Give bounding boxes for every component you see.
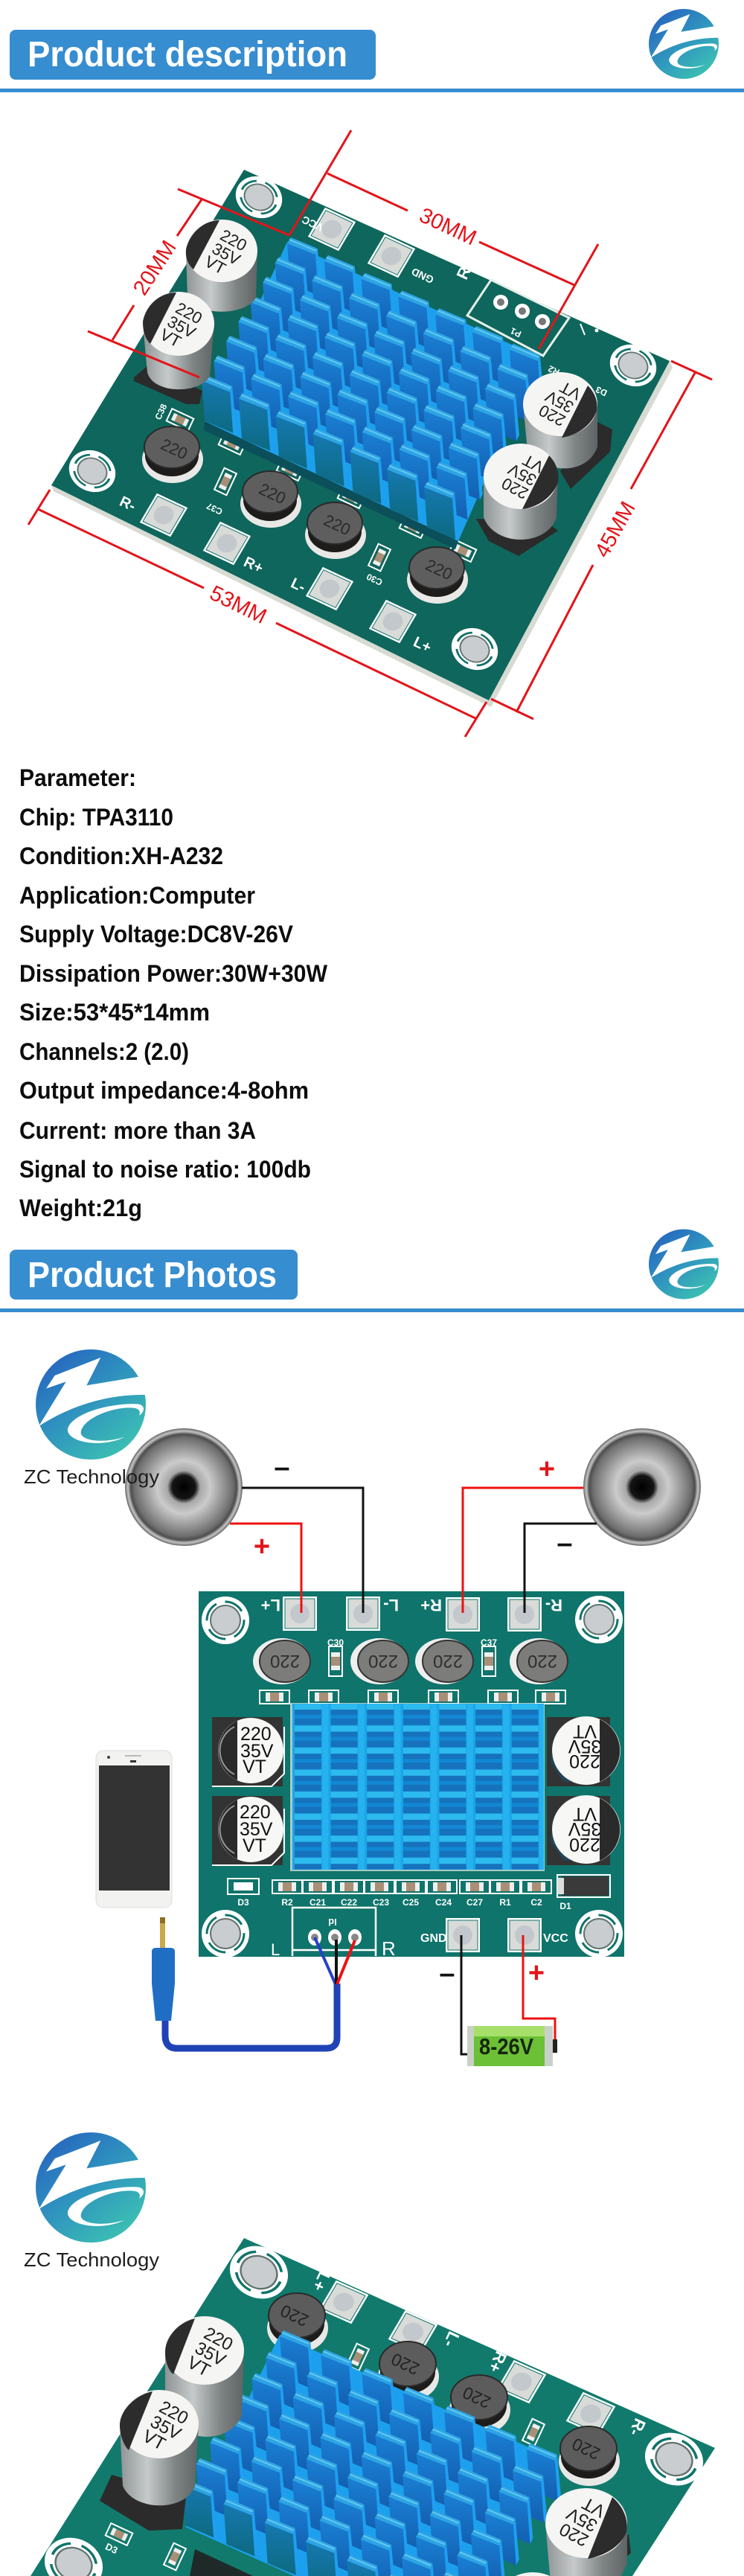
capacitor base [100, 2475, 186, 2531]
board labels: C37 [481, 1637, 497, 1648]
inductors: 220 [460, 2382, 494, 2412]
capacitor right: 220 [557, 2519, 592, 2550]
board body [51, 170, 670, 700]
capacitor lower left [212, 1796, 284, 1865]
capacitor lower left: VT [243, 1835, 266, 1856]
input wires [315, 1937, 355, 1984]
dimension labels [129, 203, 641, 629]
electrolytic capacitor right upper: 220 [536, 401, 568, 430]
parameter list: Signal to noise ratio: 100db [19, 1156, 311, 1183]
inductors: 220 [321, 511, 353, 539]
parameter list: Chip: TPA3110 [19, 804, 173, 831]
inductors: 220 [569, 2434, 603, 2464]
inductors [267, 2293, 620, 2486]
audio jack and cable [152, 1917, 337, 2048]
dimension lines [28, 130, 712, 737]
board labels: C2 [530, 1897, 542, 1908]
inductors: 220 [256, 479, 289, 508]
silkscreen labels: D3 [594, 384, 609, 398]
inductors: 220 [270, 1651, 300, 1671]
inductors [253, 1638, 568, 1684]
battery wires [461, 1935, 555, 2054]
inductors: 220 [368, 1651, 398, 1671]
electrolytic capacitor lower left: VT [157, 325, 185, 351]
polarity signs: – [557, 1528, 573, 1559]
heatsink [182, 2330, 561, 2576]
board labels: L- [440, 2328, 464, 2350]
speaker wires [230, 1488, 597, 1613]
silkscreen labels: GND [409, 266, 435, 286]
heatsink [202, 237, 544, 549]
P1 connector [292, 1908, 376, 1956]
board labels: R+ [484, 2348, 510, 2375]
logo: second header [649, 1230, 719, 1299]
battery [467, 2026, 557, 2066]
wiring diagram [96, 1428, 701, 2066]
electrolytic capacitor top left [186, 220, 257, 312]
electrolytic capacitor right lower [484, 444, 558, 540]
silkscreen labels: L- [288, 575, 308, 596]
capacitor lower left: 35V [240, 1819, 273, 1840]
capacitor right: VT [579, 2493, 609, 2521]
electrolytic capacitor right lower: 35V [505, 459, 539, 490]
capacitor bases [134, 365, 612, 556]
parameter list: Weight:21g [19, 1195, 142, 1221]
capacitor right [545, 2488, 627, 2576]
board labels: L+ [309, 2269, 334, 2294]
capacitor right: 35V [563, 2503, 601, 2536]
mounting holes [62, 169, 663, 677]
board edge [51, 361, 673, 707]
electrolytic capacitor lower left: 220 [173, 298, 205, 327]
capacitor lower right: 220 [569, 1834, 600, 1855]
board labels: C25 [403, 1897, 419, 1908]
battery: 8-26V [479, 2033, 533, 2059]
terminal pads [140, 208, 417, 643]
board labels: D3 [103, 2541, 120, 2556]
silkscreen labels: C30 [365, 571, 384, 588]
capacitor lower right: VT [573, 1803, 597, 1824]
board labels: D3 [237, 1897, 249, 1908]
dimension labels: 53MM [206, 581, 270, 629]
silkscreen labels: C38 [153, 402, 170, 421]
diode D1 [557, 1875, 610, 1897]
capacitor base right [627, 2534, 631, 2556]
parameter list: Dissipation Power:30W+30W [19, 960, 328, 987]
silkscreen labels: R- [117, 493, 138, 515]
polarity signs: – [439, 1958, 455, 1989]
board labels: R2 [281, 1897, 293, 1908]
silkscreen labels: R2 [546, 363, 561, 377]
silkscreen labels: C37 [205, 500, 224, 517]
electrolytic capacitor lower left [143, 292, 214, 389]
electrolytic capacitor top left: 220 [217, 226, 250, 255]
board labels: L+ [261, 1596, 280, 1614]
polarity signs: + [539, 1454, 555, 1485]
silkscreen labels: VCC [300, 214, 325, 234]
header: Product description: Product description [28, 35, 347, 74]
capacitor upper left: VT [243, 1757, 266, 1777]
electrolytic capacitor right upper: VT [557, 377, 584, 404]
heatsink top view [290, 1703, 545, 1871]
angled product photo [31, 2237, 715, 2576]
speaker right [583, 1428, 701, 1546]
dimension labels: 30MM [416, 203, 480, 250]
capacitor upper right [547, 1716, 620, 1786]
parameter list: Channels:2 (2.0) [19, 1038, 189, 1065]
inductors: 220 [278, 2301, 312, 2330]
P1 connector outline: P1 [508, 325, 523, 339]
mounting holes [202, 1596, 623, 1957]
electrolytic capacitor top left: VT [202, 252, 229, 278]
capacitor upper left: VT [184, 2353, 214, 2381]
inductors: 220 [527, 1651, 557, 1671]
electrolytic capacitor right upper [523, 372, 597, 468]
header: Product Photos: Product Photos [28, 1256, 277, 1295]
logo: wiring diagram [36, 1349, 147, 1460]
capacitor partially cropped [516, 2572, 550, 2576]
board labels: L- [383, 1596, 399, 1614]
board labels: R1 [499, 1897, 511, 1908]
capacitor upper left: 220 [240, 1724, 272, 1745]
small capacitors [228, 1646, 565, 1894]
board labels: C22 [341, 1897, 357, 1908]
small capacitors [106, 2344, 545, 2570]
capacitor lower left: 220 [240, 1802, 271, 1823]
capacitor upper left: 220 [200, 2324, 236, 2355]
board labels: D1 [559, 1901, 571, 1911]
inductors [142, 426, 468, 604]
dimension labels: 20MM [129, 237, 182, 300]
parameter list: Condition:XH-A232 [19, 843, 223, 869]
brand text: bottom photo: ZC Technology [24, 2249, 159, 2271]
capacitor lower right [547, 1795, 620, 1865]
board labels [237, 1596, 571, 1960]
electrolytic capacitor right upper: 35V [542, 386, 577, 417]
header: Product description [0, 30, 744, 92]
board labels: GND [420, 1932, 447, 1945]
parameter list: Parameter: [19, 764, 136, 791]
inductors: 220 [423, 555, 455, 584]
board labels: C27 [466, 1897, 483, 1908]
board labels: R- [545, 1596, 562, 1614]
board labels: R+ [420, 1596, 442, 1614]
board labels: R- [626, 2415, 650, 2439]
board body [31, 2238, 715, 2576]
electrolytic capacitor right lower: 220 [498, 474, 531, 503]
silkscreen labels: R+ [241, 554, 266, 577]
capacitor upper right: 35V [568, 1736, 601, 1757]
parameter list: Application:Computer [19, 882, 255, 909]
mounting holes [36, 2237, 712, 2576]
polarity signs: + [254, 1531, 270, 1562]
capacitor upper left: 35V [191, 2338, 229, 2371]
board labels: L [271, 1940, 280, 1959]
capacitor lower left: 35V [147, 2412, 185, 2444]
terminal pads [283, 1597, 542, 1952]
parameter list: Output impedance:4-8ohm [19, 1077, 309, 1104]
capacitor upper right: 220 [569, 1751, 600, 1771]
capacitor upper left [165, 2316, 244, 2437]
capacitor upper left [212, 1717, 284, 1786]
logo: bottom photo [36, 2132, 147, 2243]
speaker left [125, 1428, 243, 1546]
board labels: C21 [310, 1897, 326, 1908]
capacitor upper left: 35V [240, 1741, 274, 1762]
capacitor lower left: VT [139, 2426, 169, 2455]
dark components near lower edge [190, 2549, 253, 2576]
parameter list: Current: more than 3A [19, 1117, 256, 1144]
inductors: 220 [158, 435, 190, 463]
small ceramic capacitors [167, 409, 476, 571]
board labels: VCC [543, 1932, 568, 1945]
parameter list [19, 764, 328, 1221]
parameter list: Size:53*45*14mm [19, 999, 210, 1026]
electrolytic capacitor right lower: VT [519, 450, 547, 477]
phone icon [96, 1751, 172, 1908]
brand text: wiring diagram: ZC Technology [24, 1466, 159, 1488]
board labels: C30 [327, 1637, 344, 1648]
product photo with dimensions [28, 130, 712, 737]
header: Product Photos [0, 1250, 744, 1312]
polarity signs: + [528, 1957, 545, 1989]
board labels: R [382, 1937, 396, 1960]
inductors: 220 [388, 2349, 423, 2379]
terminal pads [319, 2281, 615, 2435]
capacitor lower right: 35V [568, 1818, 601, 1839]
board top view [199, 1591, 624, 1957]
electrolytic capacitor top left: 35V [209, 239, 243, 269]
inductors: 220 [433, 1651, 463, 1671]
polarity signs [254, 1452, 573, 1989]
capacitor lower left: 220 [155, 2397, 191, 2429]
capacitor lower left [120, 2390, 199, 2505]
silkscreen labels: R [453, 263, 475, 282]
P1 connector outline [467, 280, 598, 356]
board labels: C24 [435, 1897, 452, 1908]
parameter list: Supply Voltage:DC8V-26V [19, 921, 294, 947]
board labels [103, 2269, 650, 2556]
capacitor upper right: VT [573, 1721, 597, 1742]
P1 connector: Id [328, 1917, 337, 1928]
dimension labels: 45MM [591, 498, 641, 562]
silkscreen labels [117, 214, 609, 656]
logo: header one [649, 9, 719, 79]
polarity signs: – [274, 1452, 290, 1483]
silkscreen labels: L+ [411, 634, 434, 656]
electrolytic capacitor lower left: 35V [164, 312, 199, 342]
board labels: C23 [373, 1897, 389, 1908]
